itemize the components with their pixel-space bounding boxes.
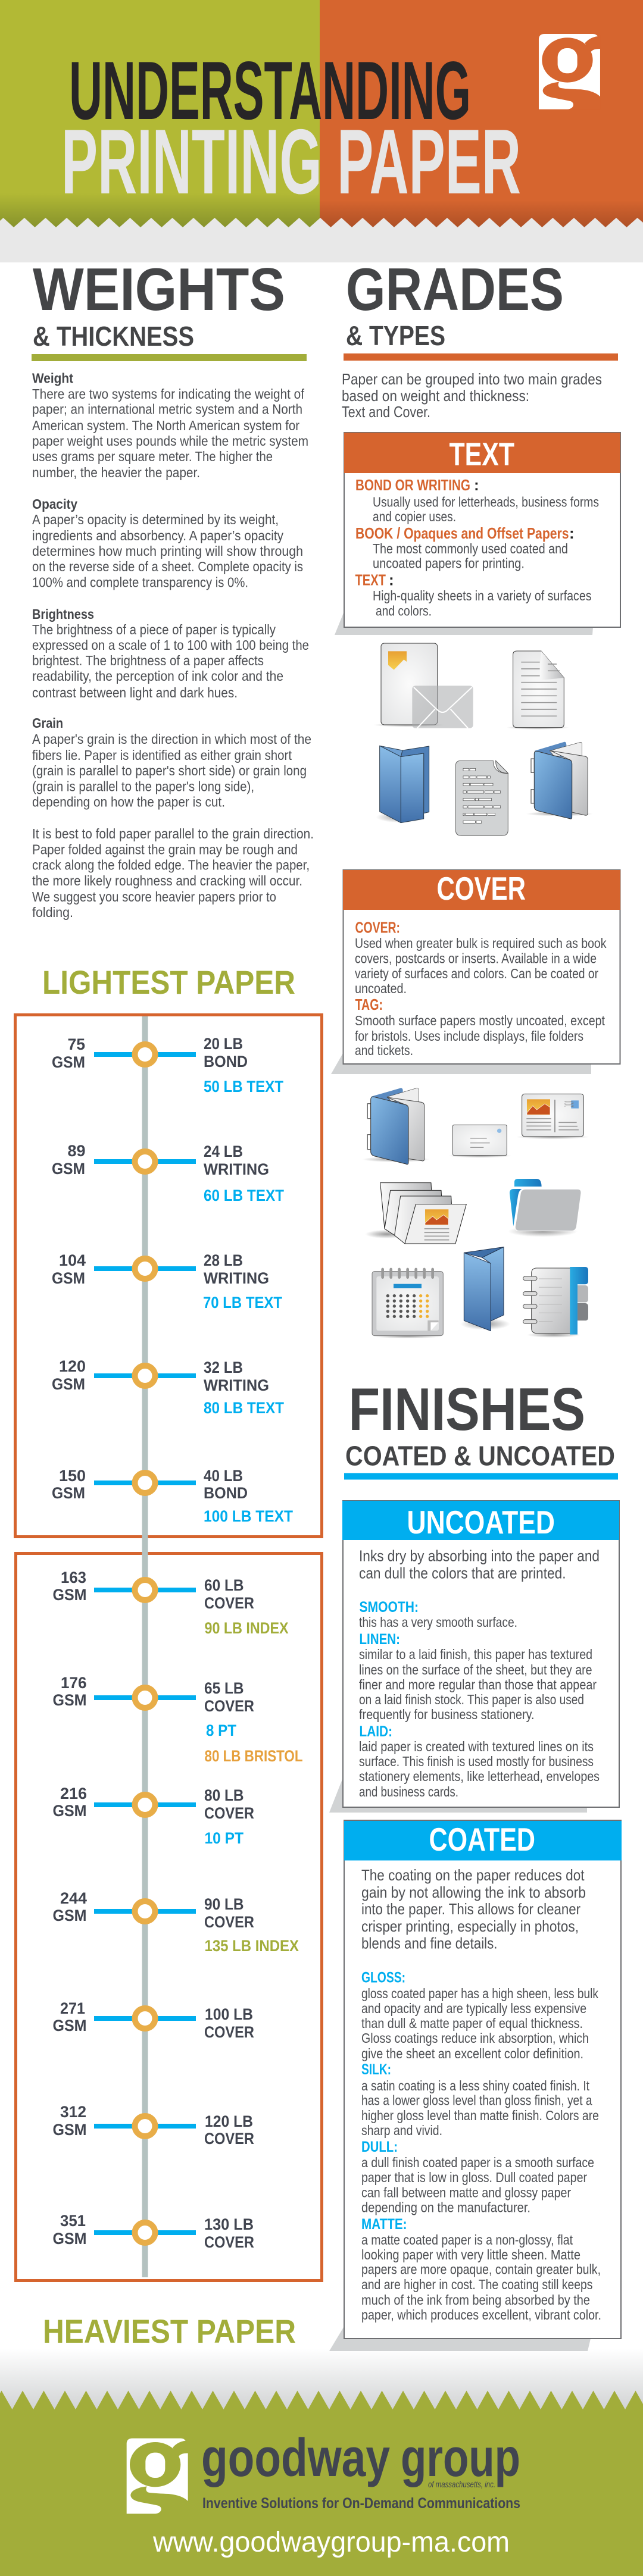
row: 104 gsm: 104 [59,1251,86,1269]
row: 89 gsm: 89 [68,1142,86,1160]
text block: intro: based on weight and thickness: [342,387,529,405]
footer background [0,2349,643,2576]
row: 176 gsm [52,1674,302,1765]
panel heading: uncoated: UNCOATED [407,1504,555,1541]
row: 120 gsm: 32 LB [204,1359,243,1376]
entry: silk: SILK: [361,2061,391,2078]
entry: bond or writing: Usually used for letterheads, business forms [373,494,599,509]
entry: book opaques and offset papers: : [569,524,575,542]
row: 104 gsm: 70 LB TEXT [203,1294,282,1312]
icon: tabbed notebook [523,1267,588,1338]
icon: goodway g logo [127,2439,189,2514]
row: 351 gsm: 351 [60,2212,86,2230]
row: 89 gsm: 60 LB TEXT [204,1187,284,1204]
text block: grain: (grain is parallel to paper's short side) or grain long [32,763,307,778]
footer branding [127,2428,520,2558]
entry: linen: lines on the surface of the sheet, but they are [359,1662,592,1677]
subheading: types: & TYPES [346,320,445,351]
panel heading: coated: COATED [429,1821,535,1858]
row: 104 gsm: 28 LB [204,1251,243,1269]
entry: dull: paper that is low in gloss. Dull coated paper [361,2170,587,2185]
entry: book opaques and offset papers: uncoated papers for printing. [373,556,525,571]
text block: weight: uses grams per square meter. The higher the [32,449,273,464]
panel: paper weight timeline [15,963,322,2350]
panel: uncoated [329,1501,619,1813]
heading: lightest paper: LIGHTEST PAPER [42,963,295,1001]
entry: linen: similar to a laid finish, this paper has textured [359,1647,592,1662]
row: 75 gsm: GSM [52,1053,85,1071]
row: 271 gsm: 100 LB [205,2005,253,2023]
entry: bond or writing: and copier uses. [373,509,456,524]
entry: dull: depending on the manufacturer. [361,2199,530,2215]
row: 176 gsm: 176 [61,1674,87,1692]
row: 163 gsm: 163 [61,1569,86,1586]
entry: matte [361,2216,601,2323]
entry: text: TEXT [355,571,386,589]
text block: folding advice: We suggest you score heavier papers prior to [32,889,276,904]
text block: coated intro [361,1866,586,1952]
entry: laid: and business cards. [359,1784,458,1799]
icon: blue brochure [376,746,429,823]
entry: text [355,571,592,619]
row: 216 gsm: COVER [204,1804,254,1822]
entry: cover: covers, postcards or inserts. Available in a wide [355,951,597,966]
text block: grain [32,715,311,809]
icon: goodway g logo white [539,34,601,109]
text block: opacity: A paper’s opacity is determined by its weight, [32,512,279,527]
row: 104 gsm: GSM [52,1269,85,1287]
header banner [0,0,643,262]
row: 150 gsm: 150 [59,1467,86,1485]
text block: uncoated intro: can dull the colors that are printed. [359,1564,566,1582]
entry: silk: a satin coating is a less shiny coated finish. It [361,2078,590,2093]
text block: opacity: ingredients and absorbency. A paper’s opacity [32,528,283,543]
text block: intro: Text and Cover. [342,403,430,421]
icon: blue binder [526,742,594,819]
row: 89 gsm: WRITING [204,1160,269,1178]
text block: weight: Weight [32,370,73,386]
row: 120 gsm: 80 LB TEXT [204,1399,284,1417]
heading: heaviest paper: HEAVIEST PAPER [43,2312,296,2350]
entry: tag: for bristols. Uses include displays, file folders [355,1028,583,1044]
panel: weights and thickness [32,256,314,920]
entry: matte: MATTE: [361,2216,407,2233]
entry: laid: stationery elements, like letterhead, envelopes [359,1769,600,1784]
entry: silk [361,2061,599,2138]
row: 312 gsm: 312 [60,2103,86,2121]
frame: heavier papers [15,1553,322,2280]
entry: gloss [361,1970,598,2061]
frame: lighter papers [15,1015,322,1536]
row: 163 gsm: 60 LB [204,1576,244,1594]
text block: weight [32,370,308,480]
text block: folding advice: It is best to fold paper parallel to the grain direction. [32,826,314,841]
text block: folding advice: folding. [32,904,73,920]
row: 216 gsm [52,1785,254,1847]
row: 150 gsm: 100 LB TEXT [204,1507,293,1525]
text block: brightness: expressed on a scale of 1 to 100 with 100 being the [32,637,309,653]
panel heading: text: TEXT [449,436,514,472]
icon: blue binder [362,1088,430,1165]
text block: weight: paper weight uses pounds while the metric system [32,433,308,449]
entry: matte: paper, which produces excellent, vibrant color. [361,2307,601,2323]
entry: smooth [359,1599,517,1630]
icon: wall calendar [372,1268,443,1338]
entry: linen: frequently for business stationery. [359,1707,535,1722]
row: 89 gsm: 24 LB [204,1143,243,1160]
row: 312 gsm: COVER [204,2130,254,2148]
entry: silk: has a lower gloss level than gloss finish, yet a [361,2092,592,2108]
text block: brightness: The brightness of a piece of paper is typically [32,622,276,637]
row: 244 gsm: COVER [204,1913,254,1931]
entry: linen: LINEN: [360,1631,400,1648]
row: 150 gsm: GSM [52,1484,85,1502]
text block: brightness [32,606,309,700]
row: 150 gsm: BOND [204,1484,248,1502]
row: 351 gsm [52,2212,254,2251]
text block: opacity: on the reverse side of a sheet. Complete opacity is [32,559,303,574]
row: 163 gsm: GSM [52,1586,87,1604]
entry: cover: uncoated. [355,981,407,996]
entry: matte: looking paper with very little sheen. Matte [361,2247,580,2262]
text block: brightness: readability, the perception of ink color and the [32,668,283,684]
subheading: coated and uncoated: COATED & UNCOATED [345,1440,615,1471]
entry: smooth: this has a very smooth surface. [359,1614,517,1630]
row: 75 gsm: 20 LB [204,1035,243,1053]
row: 89 gsm: GSM [52,1160,85,1178]
text block: folding advice: crack along the folded edge. The heavier the paper, [32,857,310,872]
icons: cover grade products [362,1088,589,1338]
text block: brightness: Brightness [32,606,94,622]
text block: opacity: Opacity [32,496,77,512]
text block: intro: Paper can be grouped into two main grades [342,370,602,388]
entry: cover: variety of surfaces and colors. Can be coated or [355,966,598,981]
row: 163 gsm: COVER [204,1594,254,1612]
text block: weight: American system. The North American system for [32,418,299,433]
text block: grain: (grain is parallel to the paper's long side), [32,778,254,794]
text block: intro [342,370,602,421]
text block: opacity: 100% and complete transparency is 0%. [32,575,248,590]
row: 271 gsm: 271 [60,1999,85,2017]
text block: grain: depending on how the paper is cut. [32,794,225,809]
row: 312 gsm [52,2103,254,2148]
entry: cover: Used when greater bulk is required such as book [355,935,607,951]
entry: linen: on a laid finish stock. This paper is also used [359,1692,584,1707]
entry: tag: and tickets. [355,1043,413,1058]
row: 120 gsm: 120 [59,1357,86,1375]
row: 89 gsm [52,1142,284,1204]
text block: uncoated intro [359,1547,600,1582]
entry: gloss: gloss coated paper has a high sheen, less bulk [361,1986,598,2001]
row: 75 gsm: 50 LB TEXT [204,1078,283,1095]
panel: cover grade [331,870,620,1074]
row: 150 gsm [52,1467,293,1525]
entry: linen [359,1631,597,1722]
entry: matte: a matte coated paper is a non-glossy, flat [361,2232,573,2248]
row: 244 gsm: 135 LB INDEX [205,1937,299,1955]
entry: book opaques and offset papers: BOOK / Opaques and Offset Papers [355,524,569,542]
heading: weights: WEIGHTS [33,256,285,323]
row: 163 gsm [52,1569,288,1637]
row: 216 gsm: 10 PT [205,1829,244,1847]
entry: matte: papers are more opaque, contain greater bulk, [361,2261,601,2277]
row: 216 gsm: 80 LB [204,1786,244,1804]
entry: gloss: Gloss coatings reduce ink absorption, which [361,2030,589,2046]
entry: laid: surface. This finish is used mostly for business [359,1754,594,1769]
entry: gloss: GLOSS: [361,1970,405,1986]
entry: gloss: give the sheet an excellent color definition. [361,2046,583,2061]
entry: bond or writing: BOND OR WRITING [355,476,470,494]
row: 176 gsm: 8 PT [206,1721,236,1739]
panel: grades and types intro [342,256,618,421]
text block: coated intro: blends and fine details. [361,1934,498,1952]
text block: coated intro: The coating on the paper reduces dot [361,1866,585,1884]
website: www.goodwaygroup-ma.com [152,2527,510,2558]
row: 163 gsm: 90 LB INDEX [205,1619,288,1637]
entry: bond or writing [355,476,599,524]
text block: uncoated intro: Inks dry by absorbing into the paper and [359,1547,600,1565]
entry: tag [355,996,605,1058]
row: 120 gsm [52,1357,284,1417]
row: 244 gsm: 90 LB [204,1895,244,1913]
icon: document with folded corner [506,651,570,730]
entry: silk: higher gloss level than matte finish. Colors are [361,2108,599,2123]
row: 104 gsm [52,1251,282,1312]
subheading: thickness: & THICKNESS [33,321,194,352]
row: 176 gsm: 80 LB BRISTOL [205,1747,302,1765]
row: 312 gsm: GSM [52,2121,87,2139]
text block: grain: A paper's grain is the direction in which most of the [32,731,311,747]
entry: book opaques and offset papers [355,524,575,571]
row: 244 gsm: 244 [60,1889,87,1907]
entry: linen: finer and more regular than those that appear [359,1677,597,1692]
entry: laid [359,1723,600,1799]
icon: gray text document [455,760,508,835]
row: 271 gsm: GSM [52,2017,87,2034]
text block: folding advice: the more likely roughness and cracking will occur. [32,873,302,888]
entry: dull [361,2139,594,2215]
icon: envelope [448,1125,511,1158]
text block: brightness: brightest. The brightness of a paper affects [32,653,264,668]
row: 271 gsm [52,1999,254,2041]
row: 312 gsm: 120 LB [205,2112,253,2130]
entry: dull: a dull finish coated paper is a smooth surface [361,2155,594,2170]
row: 244 gsm [52,1889,299,1955]
entry: gloss: and opacity and are typically less expensive [361,2001,586,2016]
row: 104 gsm: WRITING [204,1269,269,1287]
row: 351 gsm: COVER [204,2233,254,2251]
entry: laid: laid paper is created with textured lines on its [359,1739,594,1754]
entry: laid: LAID: [360,1723,392,1740]
row: 176 gsm: COVER [204,1697,254,1715]
panel: finishes heading [344,1376,618,1479]
timeline spine [142,1016,148,2277]
text block: coated intro: gain by not allowing the ink to absorb [361,1883,586,1901]
panel: coated [329,1820,622,2351]
entry: cover: COVER: [355,919,400,937]
company name: group [401,2428,520,2488]
company suffix: of massachusetts, inc. [428,2480,495,2490]
icons: text grade products [373,643,594,835]
tagline: Inventive Solutions for On-Demand Communications [202,2495,520,2512]
row: 216 gsm: GSM [52,1802,87,1820]
heading: finishes: FINISHES [349,1376,585,1443]
icon: letterhead and envelope [373,643,473,728]
company name: goodway [201,2428,390,2488]
entry: text: High-quality sheets in a variety of surfaces [373,588,592,603]
text block: coated intro: into the paper. This allows for cleaner [361,1900,580,1918]
row: 150 gsm: 40 LB [204,1467,243,1485]
entry: smooth: SMOOTH: [360,1599,419,1616]
row: 244 gsm: GSM [52,1907,87,1924]
entry: matte: and are higher in cost. The coating still keeps [361,2277,593,2292]
entry: bond or writing: : [474,476,479,494]
entry: dull: DULL: [361,2139,398,2155]
row: 176 gsm: GSM [52,1691,87,1709]
text block: opacity: determines how much printing will show through [32,543,303,559]
entry: text: and colors. [376,603,432,619]
row: 120 gsm: GSM [52,1375,85,1393]
row: 120 gsm: WRITING [204,1376,269,1394]
heading: grades: GRADES [346,256,564,323]
entry: gloss: than dull & matte paper of equal thickness. [361,2015,583,2031]
entry: text: : [389,571,394,589]
icon: postcard [516,1094,589,1139]
row: 351 gsm: GSM [52,2230,87,2248]
row: 271 gsm: COVER [204,2023,254,2041]
row: 75 gsm: BOND [204,1053,248,1071]
entry: cover [355,919,607,996]
entry: dull: can fall between matte and glossy paper [361,2185,571,2201]
icon: file folder [508,1179,581,1237]
text block: grain: Grain [32,715,63,731]
panel: text grade [335,433,620,635]
icon: tri-fold brochure [460,1247,510,1331]
entry: tag: Smooth surface papers mostly uncoated, except [355,1013,605,1028]
text block: opacity [32,496,303,590]
text block: grain: fibers lie. Paper is identified as either grain short [32,747,292,763]
text block: coated intro: crisper printing, especially in photos, [361,1917,579,1935]
row: 351 gsm: 130 LB [204,2215,254,2233]
row: 75 gsm [52,1035,283,1095]
entry: book opaques and offset papers: The most commonly used coated and [373,541,568,556]
panel heading: cover: COVER [437,870,526,907]
icon: z-fold brochure [365,1183,466,1244]
entry: tag: TAG: [355,996,383,1013]
text block: weight: There are two systems for indicating the weight of [32,386,305,402]
row: 216 gsm: 216 [60,1785,87,1802]
text block: weight: number, the heavier the paper. [32,465,200,480]
text block: folding advice: Paper folded against the grain may be rough and [32,841,298,857]
row: 75 gsm: 75 [68,1035,85,1053]
text block: folding advice [32,826,314,920]
entry: silk: sharp and vivid. [361,2123,442,2138]
text block: brightness: contrast between light and dark hues. [32,685,238,700]
row: 176 gsm: 65 LB [204,1679,244,1697]
entry: matte: much of the ink from being absorbed by the [361,2292,590,2308]
text block: weight: paper; an international metric system and a North [32,401,302,417]
